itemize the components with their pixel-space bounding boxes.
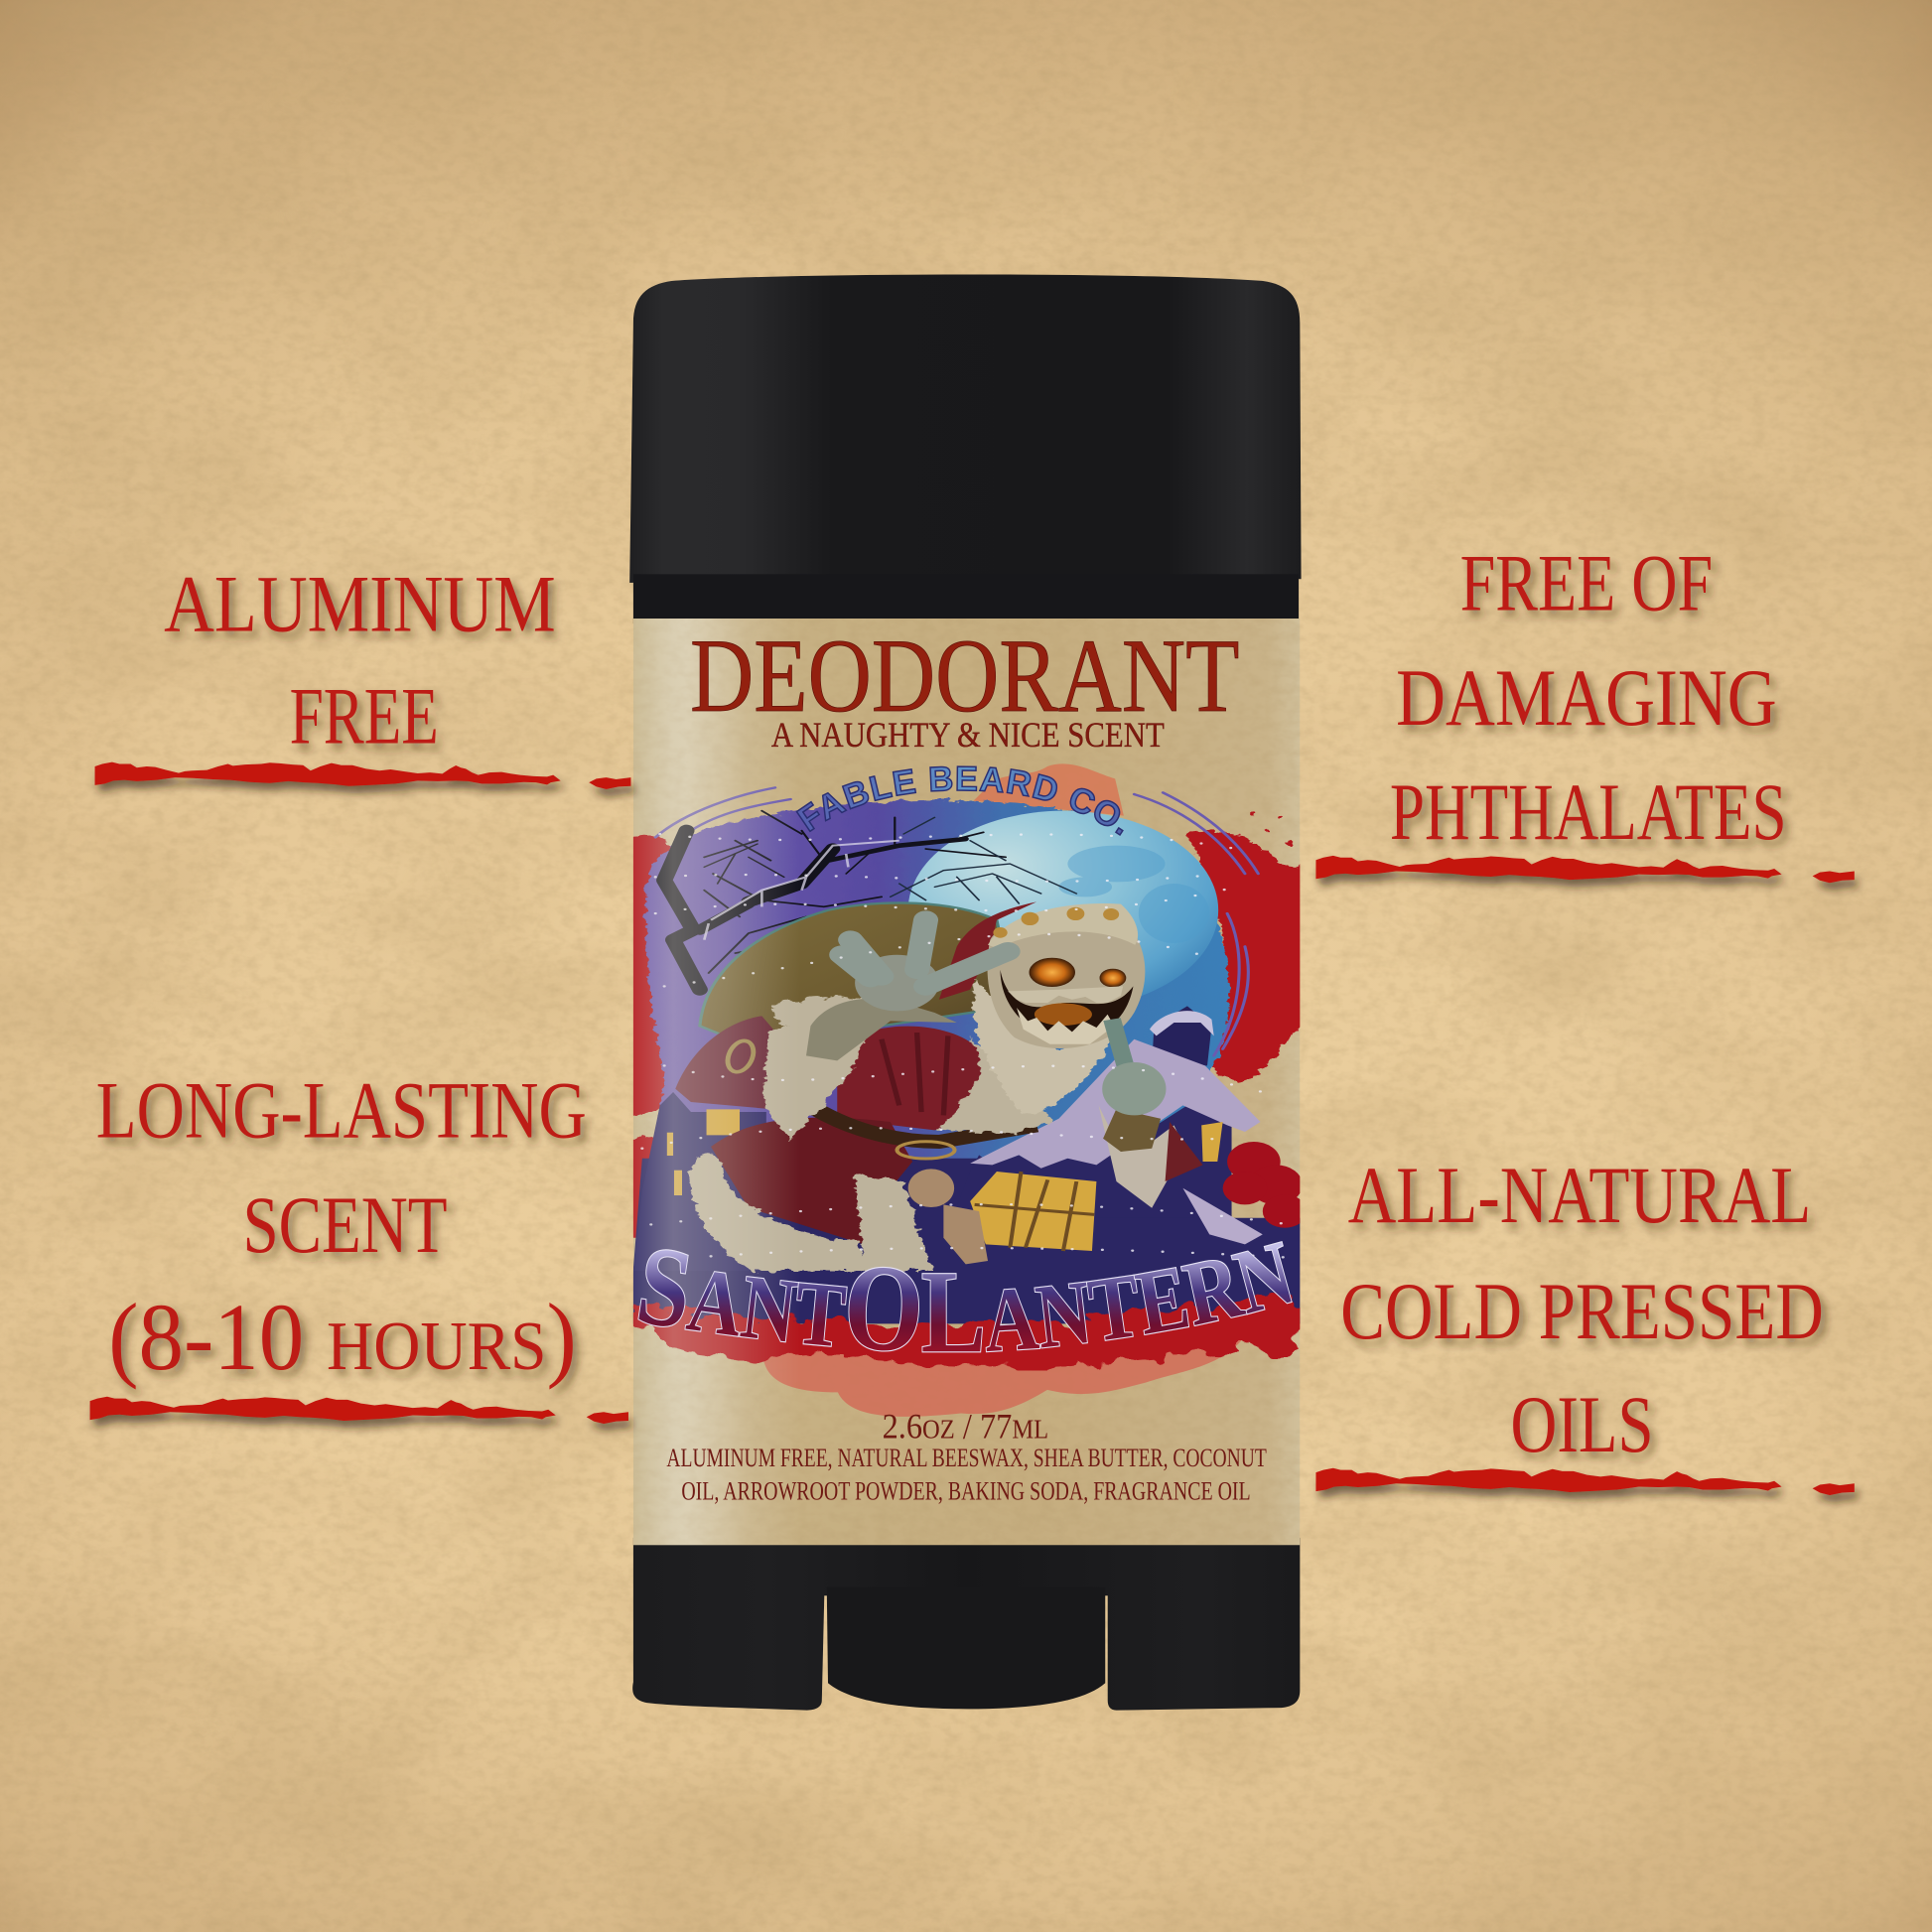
label heading: deodorant: DEODORANT — [690, 618, 1240, 734]
callout: free of damaging phthalates — [1390, 537, 1787, 857]
red underline: aluminum free — [95, 762, 630, 789]
ingredients: ALUMINUM FREE, NATURAL BEESWAX, SHEA BUTTER, COCONUT — [666, 1444, 1267, 1472]
houses — [628, 1006, 1307, 1323]
moon — [908, 811, 1218, 1010]
clawed hand — [806, 920, 1008, 1060]
salmon splash, top — [973, 763, 1124, 816]
blood cluster beside house — [1223, 1142, 1307, 1228]
illustration: krampus santa and moonlit scene — [624, 787, 1311, 1323]
ingredients: OIL, ARROWROOT POWDER, BAKING SODA, FRAGRANCE OIL — [681, 1476, 1251, 1505]
cylinder highlight over label — [633, 617, 1300, 1548]
callout: free of damaging phthalates: DAMAGING — [1396, 652, 1777, 743]
face — [987, 903, 1145, 1048]
red underline: oils — [1315, 1468, 1855, 1495]
callout: free of damaging phthalates: PHTHALATES — [1390, 766, 1787, 857]
grinning mouth — [1001, 970, 1133, 1044]
net weight: 2.6OZ / 77ML — [883, 1406, 1048, 1446]
red underline: phthalates — [1315, 856, 1855, 883]
callout: long-lasting scent: (8-10 HOURS) — [108, 1284, 577, 1390]
fur trim — [689, 998, 1052, 1271]
label — [624, 617, 1311, 1548]
voodoo doll — [908, 1169, 988, 1264]
callout: long-lasting scent — [96, 1065, 587, 1390]
callout: all-natural cold pressed oils: OILS — [1511, 1379, 1654, 1469]
collar band — [633, 574, 1299, 623]
label subtitle: A NAUGHTY & NICE SCENT — [771, 715, 1165, 755]
callout: free of damaging phthalates: FREE OF — [1460, 537, 1713, 627]
glowing eyes — [1030, 958, 1126, 987]
callout: aluminum free — [164, 558, 556, 760]
cap — [629, 274, 1302, 583]
ingredients — [666, 1444, 1267, 1505]
callout: aluminum free: ALUMINUM — [164, 558, 556, 648]
callout: long-lasting scent: LONG-LASTING — [96, 1065, 587, 1156]
callout: all-natural cold pressed oils — [1340, 1150, 1824, 1469]
beard — [973, 980, 1139, 1117]
callout: aluminum free: FREE — [290, 670, 439, 760]
moon craters — [1058, 846, 1209, 943]
product name: santolantern: SANTOLANTERN — [637, 1241, 1293, 1352]
red blood splash — [624, 812, 1311, 1238]
salmon splash, bottom — [740, 1337, 1244, 1417]
red coat — [675, 1016, 1036, 1244]
deodorant stick — [629, 274, 1302, 1711]
callout: all-natural cold pressed oils: COLD PRESSED — [1340, 1266, 1824, 1356]
callout: long-lasting scent: SCENT — [242, 1179, 448, 1270]
lower red smear — [633, 1289, 1300, 1366]
santa hat — [939, 901, 1036, 1000]
sack — [700, 902, 1015, 1045]
bare tree — [664, 811, 1076, 990]
hat band with gold studs — [988, 903, 1138, 948]
falling snow — [642, 834, 1290, 1261]
base and twist dial — [632, 1538, 1300, 1711]
lit windows — [667, 1109, 1223, 1251]
callout: all-natural cold pressed oils: ALL-NATURAL — [1348, 1150, 1811, 1240]
right hand gripping sack — [1099, 1020, 1203, 1208]
scratch strokes around the sky — [655, 787, 1258, 1055]
brand arc: fable beard co.: FABLE BEARD CO. — [796, 765, 1124, 836]
red underline: long-lasting — [90, 1397, 628, 1424]
night sky — [642, 797, 1231, 1159]
icy highlights on branches — [704, 841, 899, 940]
